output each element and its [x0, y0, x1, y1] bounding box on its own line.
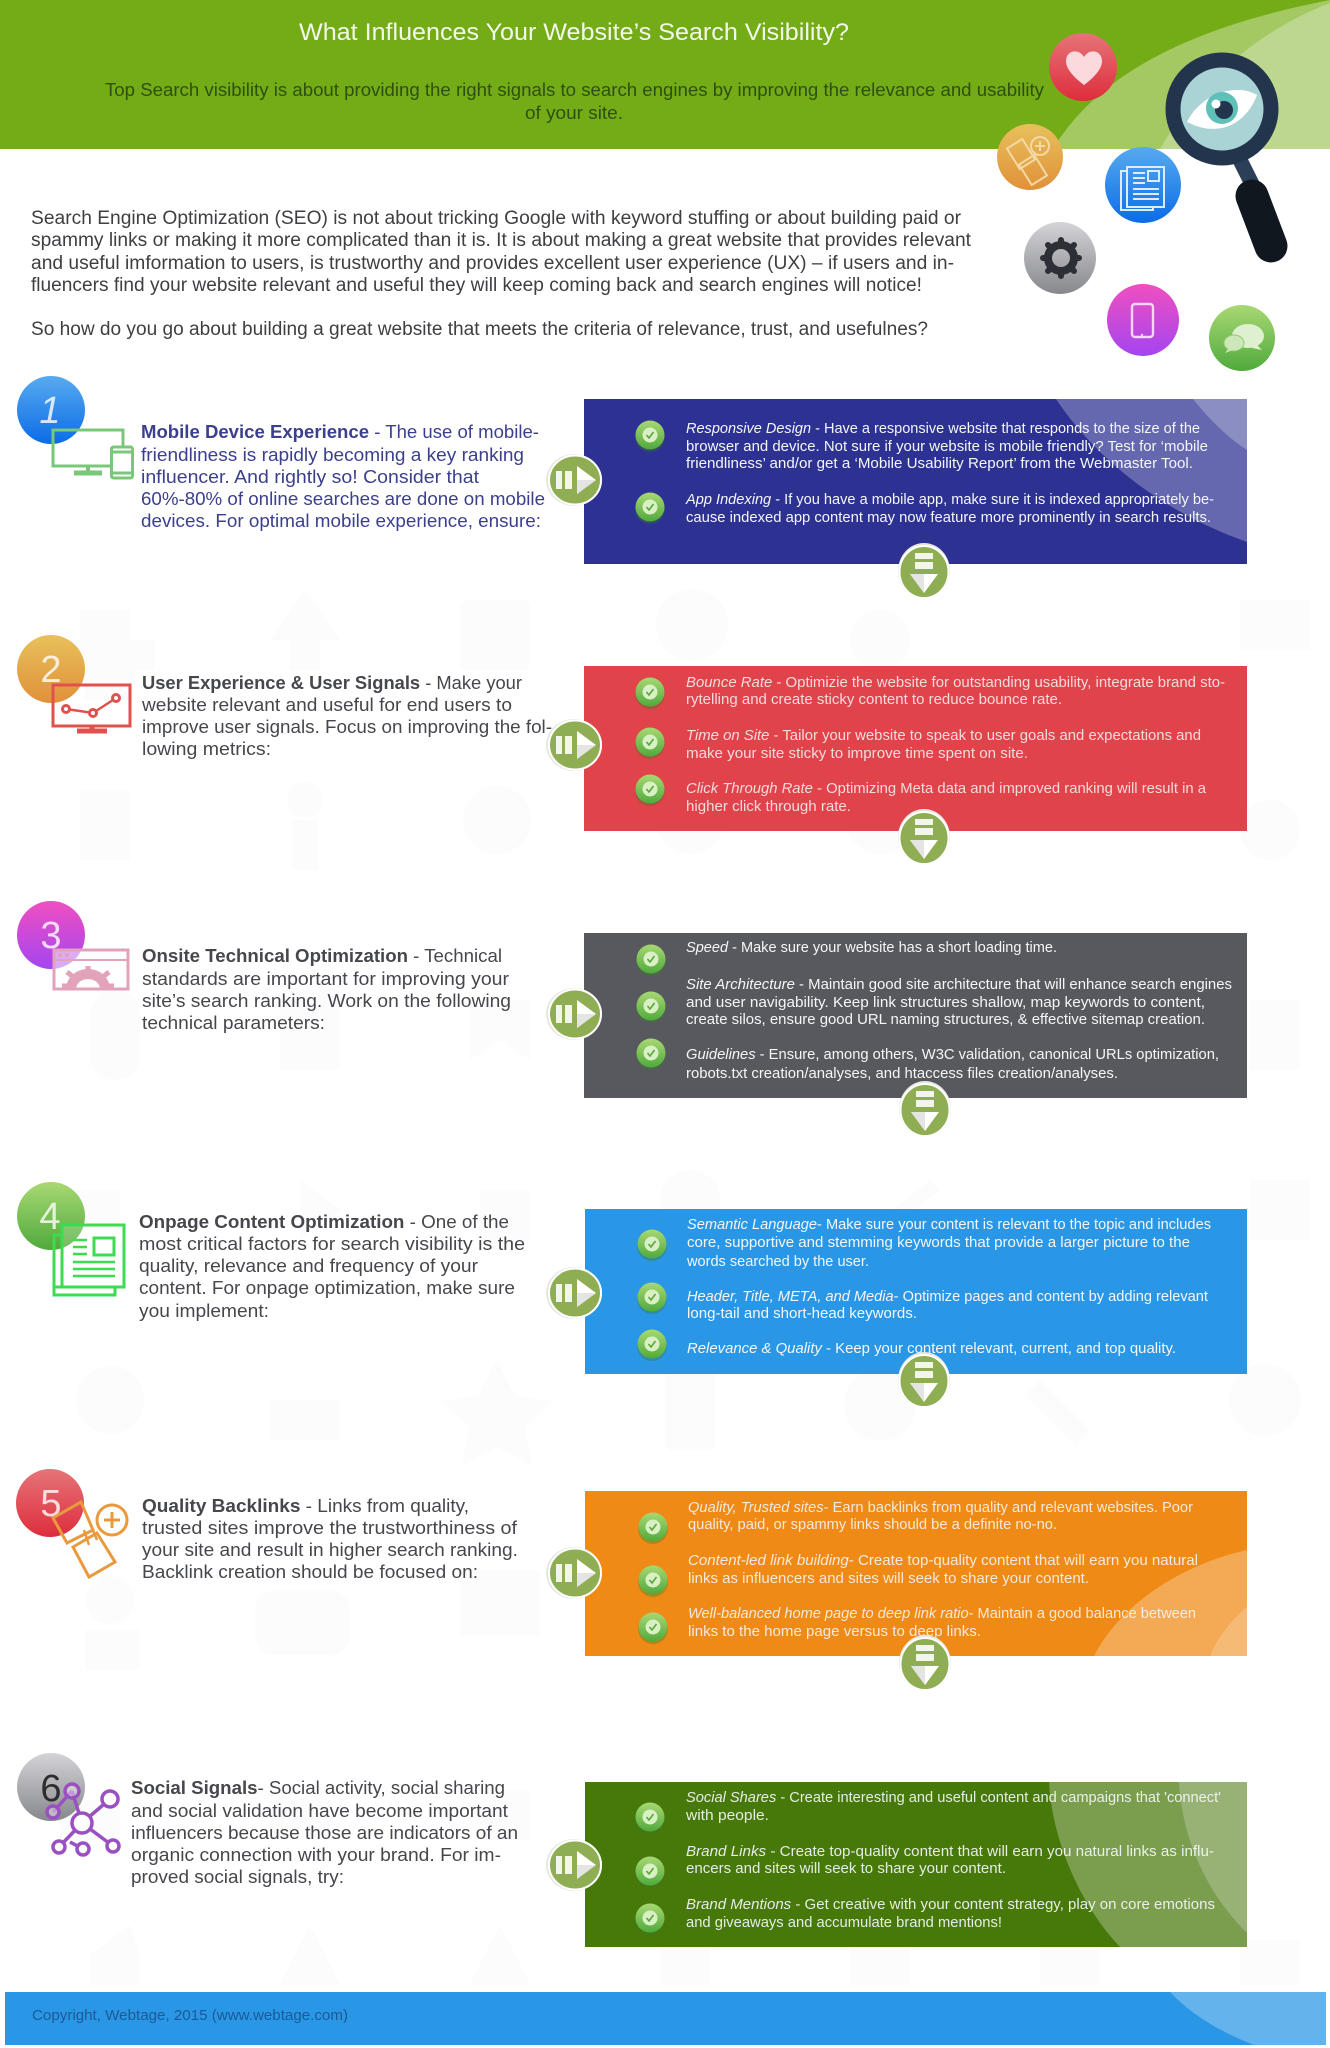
panel: mobile tips: cause indexed app content may now feature more prominently in search results.	[686, 510, 1211, 526]
number 4	[17, 1182, 85, 1250]
subtitle: Top Search visibility is about providing the right signals to search engines by improving the relevance and usability	[105, 80, 1044, 100]
panel: social signals: Social Shares - Create interesting and useful content and campaigns that 'connect'	[686, 1790, 1221, 1806]
number 3	[17, 901, 85, 969]
panel: technical parameters	[584, 933, 1247, 1098]
panel: content optimization: long-tail and short-head keywords.	[687, 1306, 917, 1322]
description text: most critical factors for search visibility is the	[139, 1234, 525, 1254]
footer bar	[5, 1992, 1326, 2045]
panel: user signals: make your site sticky to improve time spent on site.	[686, 746, 1028, 762]
panel: content optimization: Semantic Language- Make sure your content is relevant to the topic and includes	[687, 1217, 1211, 1233]
description text: friendliness is rapidly becoming a key ranking	[141, 445, 524, 465]
panel: backlink creation: Quality, Trusted sites- Earn backlinks from quality and relevant websites. Poor	[688, 1500, 1193, 1516]
panel: technical parameters: Site Architecture - Maintain good site architecture that will enhance search engines	[686, 977, 1232, 993]
panel: social signals: Brand Links - Create top-quality content that will earn you natural links as influ-	[686, 1844, 1214, 1860]
panel: social signals: and giveaways and accumulate brand mentions!	[686, 1915, 1002, 1931]
description text: trusted sites improve the trustworthiness of	[142, 1518, 518, 1538]
description text: Social Signals- Social activity, social sharing	[131, 1778, 505, 1798]
panel: technical parameters: create silos, ensure good URL naming structures, & effective sitemap creation.	[686, 1012, 1205, 1028]
icon: magnifying glass with eye	[1173, 60, 1271, 246]
icon: analytics monitor	[53, 685, 130, 731]
panel: mobile tips: friendliness’ and/or get a ‘Mobile Usability Report’ from the Webmaster Tool.	[686, 456, 1193, 472]
description text: 60%-80% of online searches are done on mobile	[141, 489, 545, 509]
description text: site’s search ranking. Work on the following	[142, 991, 511, 1011]
description text: lowing metrics:	[142, 739, 271, 759]
panel: backlink creation: Well-balanced home page to deep link ratio- Maintain a good balance between	[688, 1606, 1196, 1622]
icon: phone	[1107, 284, 1179, 356]
title: What Influences Your Website’s Search Visibility?	[299, 19, 849, 46]
description text: website relevant and useful for end users to	[141, 695, 512, 715]
panel: technical parameters: Speed - Make sure your website has a short loading time.	[686, 940, 1057, 956]
icon: chat	[1209, 305, 1275, 371]
description text: influencers because those are indicators of an	[131, 1823, 518, 1843]
arrow: right	[546, 454, 602, 506]
icon: heart	[1049, 33, 1117, 101]
icon: monitor and phone	[53, 430, 132, 478]
number 2	[17, 635, 85, 703]
panel: user signals: Bounce Rate - Optimizie the website for outstanding usability, integrate brand sto-	[686, 675, 1225, 691]
description text: quality, relevance and frequency of your	[139, 1256, 478, 1276]
number 1	[17, 376, 85, 444]
panel: user signals: Click Through Rate - Optimizing Meta data and improved ranking will result in a	[686, 781, 1207, 797]
description text: influencer. And rightly so! Consider that	[141, 467, 479, 487]
arrow: right	[546, 988, 602, 1040]
icon: browser with gear	[54, 950, 128, 989]
intro text: Search Engine Optimization (SEO) is not about tricking Google with keyword stuffing or about building paid or	[31, 208, 962, 229]
section 6: social signals	[17, 1753, 1247, 1947]
description text: devices. For optimal mobile experience, ensure:	[141, 511, 541, 531]
panel: mobile tips: App Indexing - If you have a mobile app, make sure it is indexed appropriately be-	[685, 492, 1214, 508]
panel: technical parameters: robots.txt creation/analyses, and htaccess files creation/analyses.	[686, 1066, 1118, 1082]
panel: content optimization: words searched by the user.	[686, 1254, 869, 1270]
panel: content optimization: Header, Title, META, and Media- Optimize pages and content by adding relevant	[687, 1289, 1208, 1305]
description text	[139, 1212, 525, 1321]
description text	[142, 1496, 518, 1582]
number 1: 1	[39, 390, 61, 432]
background watermark icons	[60, 589, 1310, 1985]
panel: user signals: rytelling and create sticky content to reduce bounce rate.	[686, 692, 1062, 708]
panel: social signals: encers and sites will seek to share your content.	[686, 1861, 1006, 1877]
panel: technical parameters: Guidelines - Ensure, among others, W3C validation, canonical URLs optimization,	[686, 1047, 1219, 1063]
arrow: right	[546, 719, 602, 771]
panel: backlink creation: Content-led link building - Create top-quality content that will earn you natural	[688, 1553, 1198, 1569]
intro text: So how do you go about building a great website that meets the criteria of relevance, trust, and usefulnes?	[31, 319, 928, 340]
arrow: right	[546, 1839, 602, 1891]
description text: User Experience & User Signals - Make your	[142, 673, 522, 693]
icon: link with plus	[53, 1502, 127, 1577]
panel: backlink creation: links as influencers and sites will seek to share your content.	[688, 1571, 1089, 1587]
icon: chain link	[997, 124, 1063, 190]
icon: documents	[1105, 147, 1181, 223]
number 4: 4	[39, 1196, 61, 1238]
icon: gear	[1024, 222, 1096, 294]
number 6: 6	[40, 1768, 62, 1810]
header banner	[0, 0, 1330, 149]
panel: social signals: with people.	[685, 1808, 769, 1824]
description text: your site and result in higher search ranking.	[142, 1540, 518, 1560]
panel: mobile tips: browser and device. Not sure if your website is mobile friendly? Test for ‘mobile	[686, 439, 1208, 455]
subtitle	[105, 80, 1044, 123]
arrow: down 3	[899, 1081, 951, 1137]
panel: technical parameters: and user navigability. Keep link structures shallow, map keywords to content,	[686, 995, 1205, 1011]
arrow: right	[546, 1267, 602, 1319]
panel: backlink creation: links to the home page versus to deep links.	[688, 1624, 981, 1640]
icon: network	[47, 1784, 119, 1855]
arrow: down 4	[898, 1352, 950, 1408]
description text: improve user signals. Focus on improving the fol-	[142, 717, 552, 737]
panel: content optimization: core, supportive and stemming keywords that provide a larger picture to the	[687, 1235, 1190, 1251]
description text: technical parameters:	[142, 1013, 325, 1033]
section 4: onpage content	[17, 1182, 1247, 1374]
number 5	[16, 1469, 84, 1537]
description text	[141, 422, 545, 531]
number 3: 3	[40, 915, 62, 957]
description text: and social validation have become important	[131, 1801, 508, 1821]
description text: organic connection with your brand. For im-	[131, 1845, 501, 1865]
panel: user signals: Time on Site - Tailor your website to speak to user goals and expectations and	[686, 728, 1201, 744]
panel: social signals	[585, 1782, 1247, 1947]
intro text: and useful imformation to users, is trustworthy and provides excellent user experience (UX) – if users and in-	[31, 253, 954, 274]
panel: mobile tips	[584, 399, 1247, 564]
description text: you implement:	[139, 1301, 269, 1321]
arrow: right	[546, 1547, 602, 1599]
section 1: mobile device experience	[17, 376, 1247, 564]
panel: backlink creation: quality, paid, or spammy links should be a definite no-no.	[688, 1517, 1057, 1533]
description text: content. For onpage optimization, make sure	[139, 1278, 515, 1298]
panel: mobile tips: Responsive Design - Have a responsive website that responds to the size of the	[686, 421, 1200, 437]
number 6	[17, 1753, 85, 1821]
intro text	[31, 208, 972, 340]
description text	[131, 1778, 518, 1887]
intro text: spammy links or making it more complicated than it is. It is about making a great website that provides relevant	[31, 230, 972, 251]
number 2: 2	[40, 649, 62, 691]
description text: Quality Backlinks - Links from quality,	[142, 1496, 469, 1516]
section 2: user experience	[17, 635, 1247, 831]
arrow: down 1	[898, 543, 950, 599]
description text: Onpage Content Optimization - One of the	[139, 1212, 509, 1232]
section 3: onsite technical	[17, 901, 1247, 1098]
panel: user signals: higher click through rate.	[686, 799, 851, 815]
arrow: down 2	[898, 809, 950, 865]
description text: Backlink creation should be focused on:	[142, 1562, 478, 1582]
panel: content optimization	[585, 1209, 1247, 1374]
description text: standards are important for improving your	[142, 969, 509, 989]
section 5: quality backlinks	[16, 1469, 1247, 1656]
intro text: fluencers find your website relevant and useful they will keep coming back and search engines will notice!	[31, 275, 922, 296]
panel: content optimization: Relevance & Quality - Keep your content relevant, current, and top quality.	[687, 1341, 1176, 1357]
arrow: down 5	[899, 1635, 951, 1691]
number 5: 5	[40, 1483, 62, 1525]
panel: user signals	[584, 666, 1247, 831]
description text: proved social signals, try:	[131, 1867, 344, 1887]
panel: backlink creation	[585, 1491, 1247, 1656]
description text	[141, 673, 552, 759]
description text: Onsite Technical Optimization - Technical	[142, 946, 502, 966]
subtitle: of your site.	[525, 103, 623, 123]
copyright text: Copyright, Webtage, 2015 (www.webtage.com)	[32, 2007, 348, 2024]
description text	[142, 946, 511, 1033]
description text: Mobile Device Experience - The use of mobile-	[141, 422, 539, 442]
panel: social signals: Brand Mentions - Get creative with your content strategy, play on core emotions	[686, 1897, 1215, 1913]
icon: documents	[54, 1225, 124, 1295]
